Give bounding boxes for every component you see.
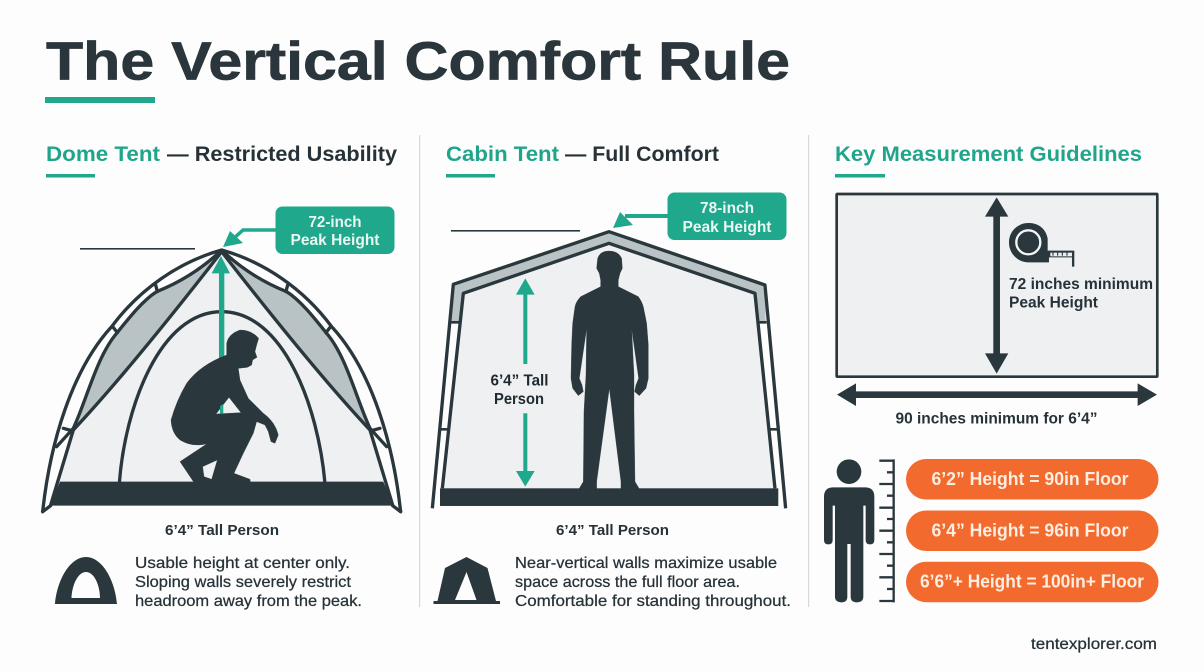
person height label: 6’4” Tall xyxy=(490,372,548,390)
callout: 72-inch peak height: 72-inch xyxy=(308,214,362,231)
heading: key measurements: Key Measurement Guidelines xyxy=(835,143,1142,166)
diagram: measurement box xyxy=(837,194,1157,406)
heading: cabin tent xyxy=(446,143,719,178)
arrow: vertical peak height xyxy=(985,197,1008,374)
description: cabin tent: space across the full floor area. xyxy=(515,574,740,591)
silhouette: standing person xyxy=(571,251,648,490)
silhouette: crouching person xyxy=(171,330,278,484)
description: dome tent: Sloping walls severely restrict xyxy=(135,574,352,591)
heading: dome tent: Dome Tent xyxy=(46,143,160,166)
pill: 6'4" height: 6’4” Height = 96in Floor xyxy=(932,520,1128,540)
diagram: dome tent xyxy=(43,250,401,512)
heading: dome tent: — Restricted Usability xyxy=(167,143,397,166)
callout: 78-inch peak height: Peak Height xyxy=(682,219,772,236)
description: cabin tent: Near-vertical walls maximize usable xyxy=(515,555,777,572)
arrow: peak height xyxy=(212,256,230,360)
callout: 72-inch peak height xyxy=(223,206,394,254)
person height label xyxy=(490,372,548,408)
reference line: cabin peak xyxy=(451,230,580,232)
tent floor xyxy=(50,482,393,506)
caption: dome person: 6’4” Tall Person xyxy=(165,522,279,539)
icon: cabin tent xyxy=(434,557,500,604)
label: peak height minimum: Peak Height xyxy=(1009,294,1098,312)
person height label: Person xyxy=(494,391,544,408)
callout: 72-inch peak height: Peak Height xyxy=(290,232,380,249)
panel: dome tent xyxy=(43,143,401,610)
pill: 6'6"+ height: 6’6”+ Height = 100in+ Floor xyxy=(920,572,1144,592)
heading: cabin tent: Cabin Tent xyxy=(446,143,559,166)
footer: site name: tentexplorer.com xyxy=(1031,636,1157,653)
title: The Vertical Comfort Rule xyxy=(46,32,790,92)
diagram: cabin tent xyxy=(432,232,786,508)
description: dome tent: headroom away from the peak. xyxy=(135,593,362,610)
title underline xyxy=(45,97,155,103)
tent floor xyxy=(440,488,778,506)
description: cabin tent xyxy=(515,555,791,610)
icon: dome tent xyxy=(55,557,117,604)
panel: cabin tent xyxy=(432,143,791,610)
pill: 6'2" height: 6’2” Height = 90in Floor xyxy=(932,469,1128,489)
heading: cabin tent: — Full Comfort xyxy=(565,143,719,166)
heading: dome tent xyxy=(46,143,397,178)
description: dome tent xyxy=(135,555,362,610)
pill: 6'2" height xyxy=(906,459,1158,500)
callout: 78-inch peak height xyxy=(613,192,786,240)
pill: 6'4" height xyxy=(906,510,1158,551)
pill: 6'6"+ height xyxy=(906,562,1158,602)
label: floor length minimum: 90 inches minimum for 6’4” xyxy=(896,410,1098,428)
label: peak height minimum: 72 inches minimum xyxy=(1009,276,1153,293)
label: peak height minimum xyxy=(1009,276,1153,312)
reference line: dome peak xyxy=(80,248,195,250)
description: cabin tent: Comfortable for standing throughout. xyxy=(515,593,791,610)
description: dome tent: Usable height at center only. xyxy=(135,555,350,572)
panel: key measurement guidelines xyxy=(824,143,1158,602)
icon: tape measure xyxy=(1009,223,1074,267)
heading: key measurements xyxy=(835,143,1142,178)
icon: person with ruler xyxy=(824,459,894,602)
callout: 78-inch peak height: 78-inch xyxy=(700,200,754,217)
caption: cabin person: 6’4” Tall Person xyxy=(556,522,669,539)
arrow: person height xyxy=(516,278,535,487)
arrow: horizontal floor length xyxy=(837,383,1157,406)
